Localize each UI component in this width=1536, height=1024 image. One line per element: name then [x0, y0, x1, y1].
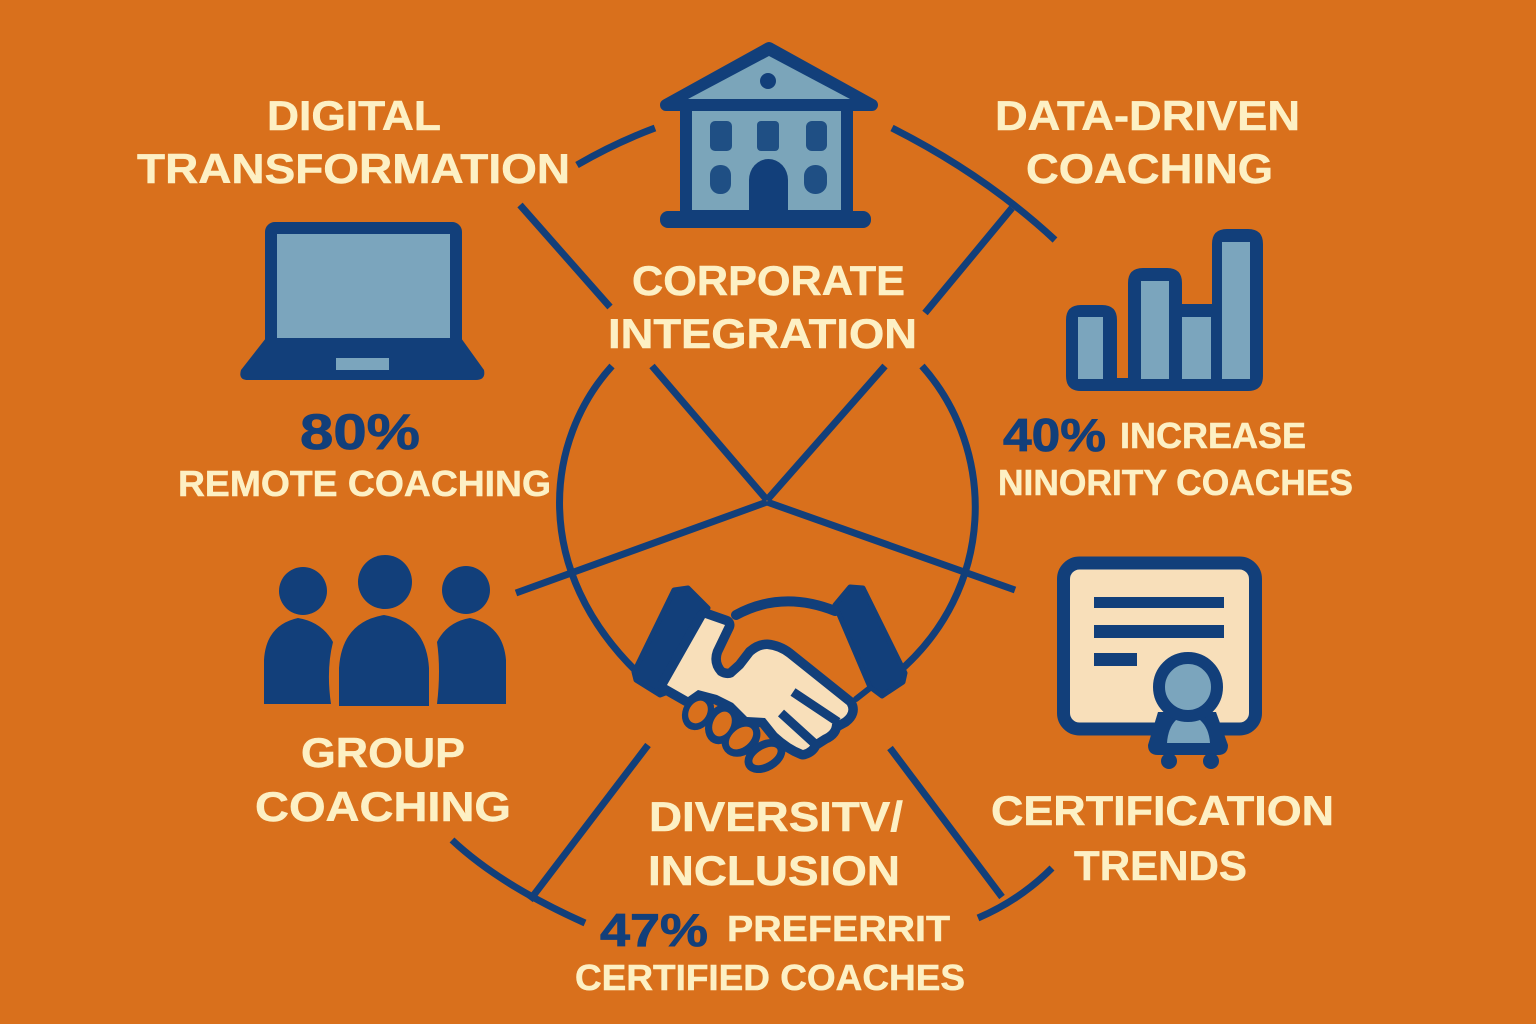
icon: group of people — [264, 555, 506, 706]
heading: diversity/inclusion — [648, 793, 903, 894]
stat: 40% increase minority coaches — [998, 409, 1353, 503]
finger slots — [781, 692, 838, 743]
stat: 40% increase minority coaches: 40% — [1003, 409, 1106, 461]
heading: group coaching: GROUP — [301, 729, 465, 776]
heading: data-driven coaching: COACHING — [1026, 145, 1273, 192]
stat: 47% preferrit certified coaches: 47% — [600, 904, 708, 956]
heading: data-driven coaching: DATA-DRIVEN — [995, 92, 1300, 139]
heading: certification trends: CERTIFICATION — [991, 787, 1334, 834]
top grip arc — [736, 601, 835, 615]
heading: group coaching — [255, 729, 511, 830]
heading: corporate integration: INTEGRATION — [608, 310, 917, 357]
clasped finger blobs — [676, 688, 792, 780]
connector network — [452, 128, 1055, 923]
icon: certificate — [1064, 563, 1256, 769]
heading: digital transformation: TRANSFORMATION — [137, 145, 570, 192]
icon: corporate building — [660, 48, 872, 228]
stat: 80% remote coaching — [178, 404, 551, 504]
heading: digital transformation — [137, 92, 570, 192]
heading: corporate integration: CORPORATE — [632, 257, 905, 304]
finger grip holes — [684, 697, 781, 769]
heading: diversity/inclusion: INCLUSION — [648, 847, 900, 894]
heading: certification trends — [991, 787, 1334, 889]
stat: 47% preferrit certified coaches — [575, 904, 965, 998]
stat: 47% preferrit certified coaches: CERTIFIED COACHES — [575, 957, 965, 998]
heading: data-driven coaching — [995, 92, 1300, 192]
heading: corporate integration — [608, 257, 917, 357]
icon: handshake — [634, 587, 905, 780]
hand — [667, 618, 848, 750]
stat: 40% increase minority coaches: INCREASE — [1120, 415, 1306, 456]
icon: bar chart — [1066, 229, 1263, 391]
heading: group coaching: COACHING — [255, 783, 511, 830]
stat: 40% increase minority coaches: NINORITY COACHES — [998, 462, 1353, 503]
stat: 80% remote coaching: REMOTE COACHING — [178, 463, 551, 504]
stat: 80% remote coaching: 80% — [300, 404, 420, 460]
heading: certification trends: TRENDS — [1074, 842, 1247, 889]
right cuff — [835, 587, 905, 696]
left cuff — [634, 588, 708, 695]
heading: digital transformation: DIGITAL — [267, 92, 441, 139]
heading: diversity/inclusion: DIVERSITV/ — [649, 793, 903, 840]
stat: 47% preferrit certified coaches: PREFERRIT — [727, 908, 950, 949]
icon: laptop — [240, 228, 484, 380]
